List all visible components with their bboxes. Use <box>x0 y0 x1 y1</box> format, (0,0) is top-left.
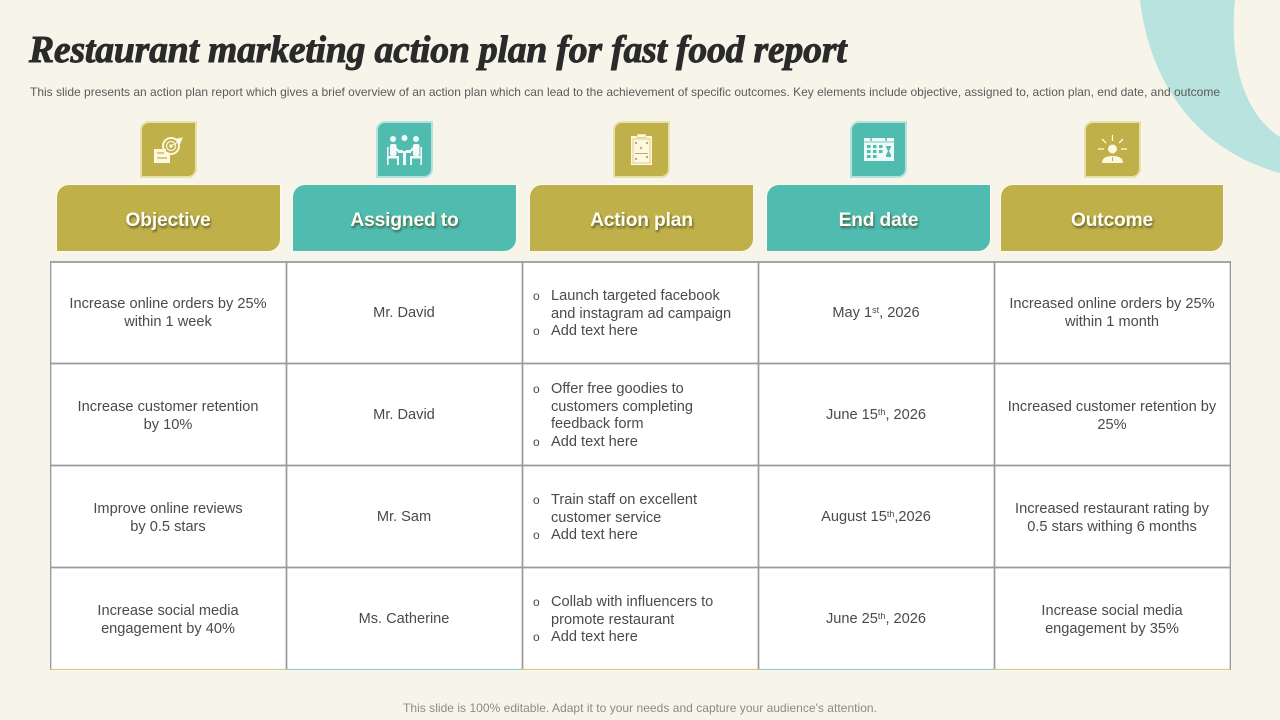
text: within 1 month <box>1065 314 1159 330</box>
header: Assigned to: Assigned to <box>350 210 459 231</box>
action plan row 2: o <box>533 382 540 396</box>
action plan row 4 <box>533 594 713 645</box>
text: 25% <box>1097 417 1127 433</box>
header: Objective: Objective <box>125 210 211 231</box>
row 4: Increase social media <box>97 603 239 619</box>
action plan row 3: customer service <box>551 510 661 526</box>
action plan row 2: o <box>533 435 540 449</box>
header: Outcome: Outcome <box>1071 210 1153 231</box>
action plan row 4: Collab with influencers to <box>551 594 713 610</box>
icon: objective target <box>140 121 197 178</box>
text: Increase social media <box>1041 603 1183 619</box>
icon: clipboard plan <box>613 121 670 178</box>
row 3 <box>93 501 243 535</box>
row 4: engagement by 40% <box>101 621 235 637</box>
header: End date: End date <box>839 210 918 231</box>
row 2: by 10% <box>144 417 192 433</box>
action plan row 1: Launch targeted facebook <box>551 288 720 304</box>
action plan row 3 <box>533 492 697 543</box>
action plan row 2 <box>533 381 693 450</box>
table background and grid <box>50 261 1231 670</box>
text: Mr. David <box>373 407 435 423</box>
row 4 <box>97 603 239 637</box>
title: Restaurant marketing action plan for fast food report <box>29 29 847 71</box>
text: Increased restaurant rating by <box>1015 501 1209 517</box>
subtitle: This slide presents an action plan report which gives a brief overview of an action plan which can lead to the achievement of specific outcomes. Key elements include objective, assigned to, action plan, end date, and outcome <box>30 85 1220 99</box>
action plan row 1: o <box>533 324 540 338</box>
header: Action plan <box>530 185 753 251</box>
action plan row 2: Offer free goodies to <box>551 381 684 397</box>
header: End date <box>767 185 990 251</box>
row 3: Improve online reviews <box>93 501 243 517</box>
row 1: within 1 week <box>124 314 212 330</box>
action plan row 4: o <box>533 595 540 609</box>
row 2 <box>78 399 258 433</box>
header: Objective <box>56 185 280 251</box>
footer note: This slide is 100% editable. Adapt it to your needs and capture your audience's attention. <box>403 701 877 715</box>
header: Outcome <box>1001 185 1223 251</box>
row 1 <box>69 296 267 330</box>
action plan row 2: Add text here <box>551 434 638 450</box>
action plan row 1: Add text here <box>551 323 638 339</box>
text: Mr. Sam <box>377 509 431 525</box>
text: 0.5 stars withing 6 months <box>1027 519 1197 535</box>
text: Ms. Catherine <box>359 611 449 627</box>
icon: idea person <box>1084 121 1141 178</box>
row 3: by 0.5 stars <box>130 519 206 535</box>
header: Assigned to <box>293 185 516 251</box>
row 1: Increase online orders by 25% <box>69 296 267 312</box>
icon: meeting people <box>376 121 433 178</box>
icon: calendar <box>850 121 907 178</box>
action plan row 4: o <box>533 630 540 644</box>
text: May 1st, 2026 <box>832 305 920 321</box>
text: June 15th, 2026 <box>826 407 926 423</box>
action plan row 4: Add text here <box>551 629 638 645</box>
action plan row 1 <box>533 288 731 339</box>
action plan row 3: o <box>533 493 540 507</box>
action plan row 3: Train staff on excellent <box>551 492 697 508</box>
action plan row 1: o <box>533 289 540 303</box>
text: engagement by 35% <box>1045 621 1179 637</box>
text: June 25th, 2026 <box>826 611 926 627</box>
decorative crescent <box>1140 0 1280 173</box>
header: Action plan: Action plan <box>590 210 693 231</box>
action plan row 4: promote restaurant <box>551 612 674 628</box>
text: Mr. David <box>373 305 435 321</box>
text: Increased online orders by 25% <box>1009 296 1215 312</box>
action plan row 3: Add text here <box>551 527 638 543</box>
text: August 15th,2026 <box>821 509 931 525</box>
action plan row 1: and instagram ad campaign <box>551 306 731 322</box>
action plan row 2: customers completing <box>551 399 693 415</box>
text: Increased customer retention by <box>1008 399 1216 415</box>
action plan row 2: feedback form <box>551 416 643 432</box>
row 2: Increase customer retention <box>78 399 258 415</box>
action plan row 3: o <box>533 528 540 542</box>
